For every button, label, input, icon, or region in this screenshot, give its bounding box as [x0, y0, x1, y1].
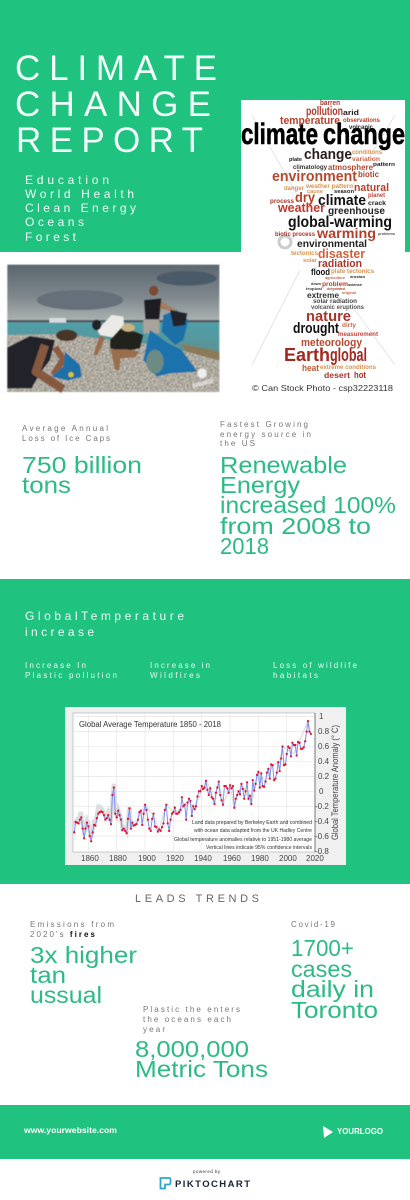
line chart: global average temperature: 1960	[223, 854, 241, 863]
word cloud image: crack	[368, 201, 387, 207]
word cloud image: tropical	[306, 286, 322, 291]
word cloud image: meteorology	[301, 337, 363, 349]
stat: covid-19: Toronto	[291, 997, 378, 1023]
website: www.yourwebsite.com	[23, 1125, 117, 1135]
stat: renewable energy: increased 100%	[220, 492, 396, 518]
word cloud image: warming	[316, 225, 376, 241]
stat: ice caps: 750 billion	[22, 452, 142, 478]
label: wildlife habitats: habitats	[273, 671, 318, 680]
line chart: global average temperature: 1880	[109, 854, 127, 863]
stat: fires emissions: 3x higher	[30, 942, 137, 968]
line chart: global average temperature: -0.2	[315, 802, 329, 811]
word cloud image: © Can Stock Photo - csp32223118	[252, 383, 393, 393]
stat: covid-19: daily in	[291, 976, 374, 1002]
word cloud image: radiation	[318, 258, 362, 270]
word cloud image: temperature	[280, 115, 340, 127]
stat: renewable energy: the US	[220, 439, 255, 448]
stat: renewable energy: Energy	[220, 472, 301, 498]
word cloud image: atmosphere	[328, 163, 374, 172]
word cloud image: process	[270, 199, 295, 205]
line chart: global average temperature: 1900	[138, 854, 156, 863]
stat: fires emissions: Emissions from	[30, 920, 114, 929]
word cloud image: pattern	[373, 162, 395, 168]
label: wildfires: Wildfires	[150, 671, 200, 680]
word cloud image: solar radiation	[313, 299, 357, 305]
word cloud image: problems	[378, 231, 396, 236]
stat: ice caps	[22, 424, 142, 498]
line chart: global average temperature: 1860	[81, 854, 99, 863]
word cloud image: original	[342, 290, 356, 295]
piktochart credit: powered by	[193, 1169, 221, 1174]
stat: renewable energy: Fastest Growing	[220, 420, 308, 429]
word cloud image: weather	[277, 200, 325, 215]
stat: renewable energy: from 2008 to	[220, 513, 371, 539]
word cloud image: Earth	[284, 345, 330, 365]
word cloud image: drought	[293, 320, 339, 337]
logo icon	[323, 1126, 333, 1138]
person: white shirt	[92, 315, 124, 355]
word cloud image: erosion	[350, 274, 366, 279]
word cloud image: weather pattern	[305, 184, 353, 190]
word cloud image: problem	[322, 282, 348, 288]
label: wildfires	[150, 661, 210, 680]
word cloud image: flood	[311, 267, 330, 277]
title: CHANGE	[15, 85, 211, 124]
line chart: global average temperature: 0.2	[318, 772, 330, 781]
word cloud image: measurement	[338, 332, 378, 338]
topic list: Oceans	[25, 215, 84, 229]
label: wildlife habitats: Loss of wildlife	[273, 661, 358, 670]
line chart: global average temperature: Land data prepared by Berkeley Earth and combined	[192, 820, 312, 826]
line chart: global average temperature: 2020	[306, 854, 324, 863]
word cloud image: greenhouse	[328, 206, 385, 217]
word cloud image: plate tectonics	[331, 269, 375, 275]
word cloud image: biotic	[358, 170, 380, 179]
footer band	[0, 1105, 410, 1159]
blue bag: left	[52, 352, 82, 381]
line chart: global average temperature: -0.8	[315, 847, 329, 856]
stat: fires emissions	[30, 920, 137, 1008]
topic list: Clean Energy	[25, 201, 136, 215]
title	[15, 49, 217, 160]
word cloud image: global	[330, 345, 367, 365]
line chart: global average temperature: Global Temperature Anomaly (° C)	[330, 725, 341, 840]
word cloud image: volcanic eruptions	[311, 305, 365, 311]
stat: ice caps: Loss of Ice Caps	[22, 434, 110, 443]
photo: beach cleanup volunteers	[7, 265, 219, 392]
word cloud image: nature	[306, 308, 351, 325]
person: crouching man left	[7, 330, 77, 389]
topic list: Education	[25, 173, 109, 187]
header band	[0, 0, 410, 252]
line chart: global average temperature: 0.8	[318, 727, 330, 736]
word cloud image: extreme	[307, 291, 340, 300]
word cloud image: climate	[318, 192, 366, 209]
line chart: global average temperature: Vertical lines indicate 95% confidence intervals	[206, 845, 313, 851]
word cloud image: change	[304, 146, 352, 163]
word cloud image: disaster	[318, 246, 365, 261]
stat: ocean plastic: Plastic the enters	[143, 1005, 240, 1014]
word cloud image: cause	[307, 189, 323, 195]
stat: ice caps: Average Annual	[22, 424, 108, 433]
stat: ocean plastic: the oceans each	[143, 1015, 231, 1024]
stat: ocean plastic: year	[143, 1025, 165, 1034]
heading: global temperature increase	[25, 609, 184, 639]
word cloud image: planet	[368, 193, 385, 199]
line chart: global average temperature: 2000	[279, 854, 297, 863]
piktochart credit: PIKTOCHART	[175, 1179, 250, 1190]
stat: covid-19: 1700+	[291, 935, 354, 961]
word cloud image: environment	[272, 168, 357, 185]
line chart: global average temperature: -0.6	[315, 832, 329, 841]
stat: renewable energy	[220, 420, 396, 559]
word cloud image: science	[348, 282, 363, 287]
word cloud image	[241, 100, 405, 398]
word cloud image: biotic process	[275, 232, 316, 238]
word cloud image: desert	[324, 371, 350, 380]
word cloud image: extreme conditions	[320, 365, 377, 371]
line chart: global average temperature: 1920	[166, 854, 184, 863]
line chart: global average temperature: 1	[319, 712, 324, 721]
logo text: YOURLOGO	[337, 1126, 383, 1136]
line chart: global average temperature	[65, 707, 346, 865]
stat: ice caps: tons	[22, 472, 71, 498]
word cloud image: danger	[284, 186, 305, 192]
word cloud image: season	[334, 189, 354, 195]
stat: renewable energy: energy source in	[220, 430, 311, 439]
word cloud image: natural	[354, 182, 389, 194]
line chart: global average temperature: 1940	[194, 854, 212, 863]
word cloud image: hot	[354, 370, 366, 380]
stat: fires emissions: tan	[30, 962, 66, 988]
title: REPORT	[16, 121, 203, 160]
label: wildfires: Increase in	[150, 661, 210, 670]
word cloud image: agriculture	[325, 275, 346, 280]
word cloud image: climate	[241, 118, 318, 151]
heading: leads trends: LEADS TRENDS	[135, 893, 259, 905]
label: wildlife habitats	[273, 661, 358, 680]
stat: covid-19	[291, 920, 378, 1023]
word cloud image: down	[311, 281, 322, 286]
stat: ocean plastic: 8,000,000	[135, 1036, 249, 1062]
stat: renewable energy: 2018	[220, 533, 269, 559]
word cloud image: global-warming	[288, 214, 392, 231]
stat: covid-19: Covid-19	[291, 920, 336, 929]
word cloud image: variation	[352, 157, 380, 163]
word cloud image: tectonics	[291, 251, 319, 257]
word cloud image: observations	[343, 118, 381, 124]
piktochart credit	[160, 1169, 250, 1190]
word cloud image: arid	[343, 110, 359, 117]
label: plastic pollution: Increase In	[25, 661, 86, 670]
panel: global temperature	[0, 579, 410, 884]
topic list: Forest	[25, 230, 77, 244]
word cloud image: conditions	[352, 150, 383, 156]
topic list	[25, 173, 136, 244]
line chart: global average temperature: 0.6	[318, 742, 330, 751]
word cloud image: pollution	[306, 104, 343, 118]
word cloud image: solar	[303, 258, 317, 264]
person: woman standing	[143, 286, 177, 333]
heading: global temperature increase: increase	[25, 625, 94, 639]
stat: ocean plastic: Metric Tons	[135, 1056, 268, 1082]
word cloud image: dirty	[342, 323, 357, 329]
topic list: World Health	[25, 187, 134, 201]
line chart: global average temperature: with ocean data adapted from the UK Hadley Centre	[194, 828, 312, 834]
title: CLIMATE	[15, 49, 217, 88]
line chart: global average temperature: Global Average Temperature 1850 - 2018	[79, 720, 222, 729]
line chart: global average temperature: 0.4	[318, 757, 330, 766]
word cloud image: dry	[295, 189, 315, 205]
word cloud image: environmental	[297, 239, 367, 250]
person: kneeling with hat	[110, 324, 143, 370]
icon: piktochart mark	[160, 1178, 170, 1188]
word cloud image: heat	[302, 363, 319, 373]
line chart: global average temperature: Global temperature anomalies relative to 1951-1980 average	[174, 837, 312, 843]
label: plastic pollution	[25, 661, 117, 680]
logo: skull	[192, 368, 213, 388]
word cloud image: plate	[289, 157, 302, 163]
word cloud image: climatology	[293, 165, 328, 171]
stat: fires emissions: ussual	[30, 982, 102, 1008]
word cloud image: volcanic	[349, 125, 374, 131]
line chart: global average temperature: -0.4	[315, 817, 329, 826]
stat: fires emissions: 2020's fires	[30, 930, 96, 939]
heading: global temperature increase: GlobalTemperature	[25, 609, 184, 623]
stat: ocean plastic	[135, 1005, 268, 1082]
stat: renewable energy: Renewable	[220, 452, 347, 478]
blue bags: right	[162, 310, 188, 345]
line chart: global average temperature: 0	[319, 787, 324, 796]
label: plastic pollution: Plastic pollution	[25, 671, 117, 680]
word cloud image: dehydrated	[327, 286, 345, 291]
stat: covid-19: cases	[291, 956, 352, 982]
word cloud image: barren	[320, 100, 340, 107]
line chart: global average temperature: 1980	[251, 854, 269, 863]
